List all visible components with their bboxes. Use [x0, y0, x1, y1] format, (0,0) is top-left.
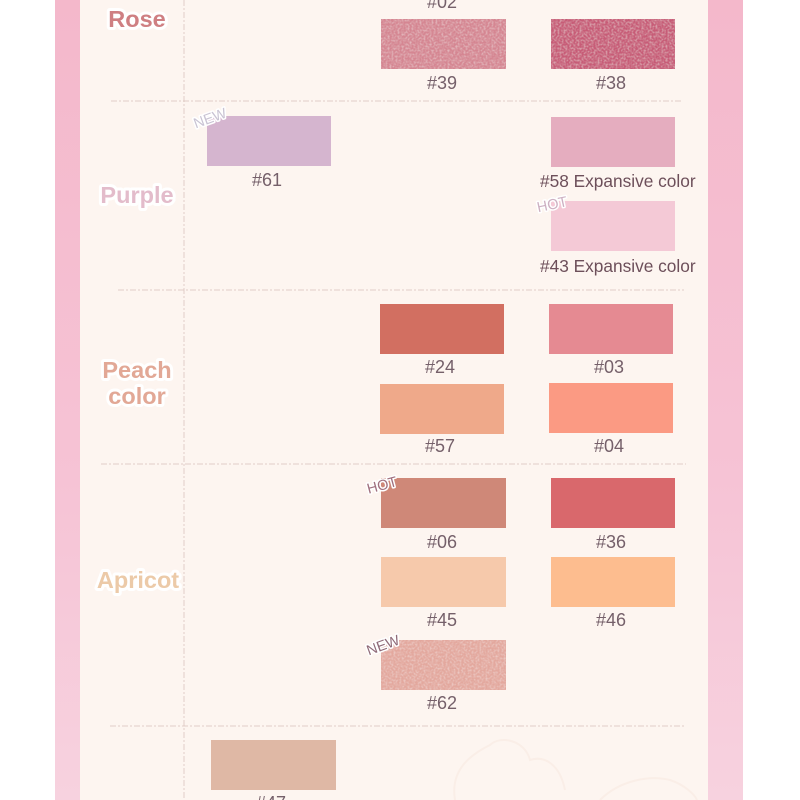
section: Rose — [108, 0, 675, 93]
right pink band — [708, 0, 743, 800]
NEW tag on #62: NEW — [365, 633, 402, 659]
swatch #39: #39 — [427, 73, 457, 93]
swatch #38 — [551, 19, 675, 93]
category label: Purple: Purple — [100, 182, 174, 208]
swatch #38: #38 — [596, 73, 626, 93]
HOT tag on #06: HOT — [365, 474, 399, 498]
category label: Peach color — [102, 357, 172, 409]
swatch #58: #58 Expansive color — [540, 171, 696, 191]
section: bottom swatch — [211, 740, 336, 800]
NEW tag on #61: NEW — [192, 106, 229, 132]
swatch #61: #61 — [252, 170, 282, 190]
swatch #06 — [381, 478, 506, 552]
swatch #57 — [380, 384, 504, 456]
section: Apricot — [97, 474, 675, 713]
left pink band — [55, 0, 80, 800]
swatch #45 — [381, 557, 506, 630]
swatch #39 — [381, 19, 506, 93]
swatch #57: #57 — [425, 436, 455, 456]
section: Purple — [100, 106, 696, 276]
category label: Peach color: Peach — [102, 357, 172, 383]
swatch #04 — [549, 383, 673, 456]
swatch #24 — [380, 304, 504, 377]
swatch #03: #03 — [594, 357, 624, 377]
swatch #24: #24 — [425, 357, 455, 377]
swatch #62: #62 — [427, 693, 457, 713]
swatch #61 — [207, 116, 331, 190]
swatch #03 — [549, 304, 673, 377]
section: Peach color — [102, 304, 673, 456]
swatch #36 — [551, 478, 675, 552]
swatch #62 — [381, 640, 506, 713]
category label: Peach color: color — [108, 383, 166, 409]
swatch #58 — [540, 117, 696, 191]
swatch #04: #04 — [594, 436, 624, 456]
swatch #46 — [551, 557, 675, 630]
swatch #45: #45 — [427, 610, 457, 630]
swatch #46: #46 — [596, 610, 626, 630]
category label: Apricot: Apricot — [97, 567, 179, 593]
swatch #43 — [540, 201, 696, 276]
cream panel — [80, 0, 708, 800]
swatch #36: #36 — [596, 532, 626, 552]
HOT tag on #43: HOT — [536, 194, 569, 216]
category label: Rose: Rose — [108, 6, 166, 32]
swatch #06: #06 — [427, 532, 457, 552]
swatch #43: #43 Expansive color — [540, 256, 696, 276]
cloud outline decoration — [454, 740, 697, 800]
